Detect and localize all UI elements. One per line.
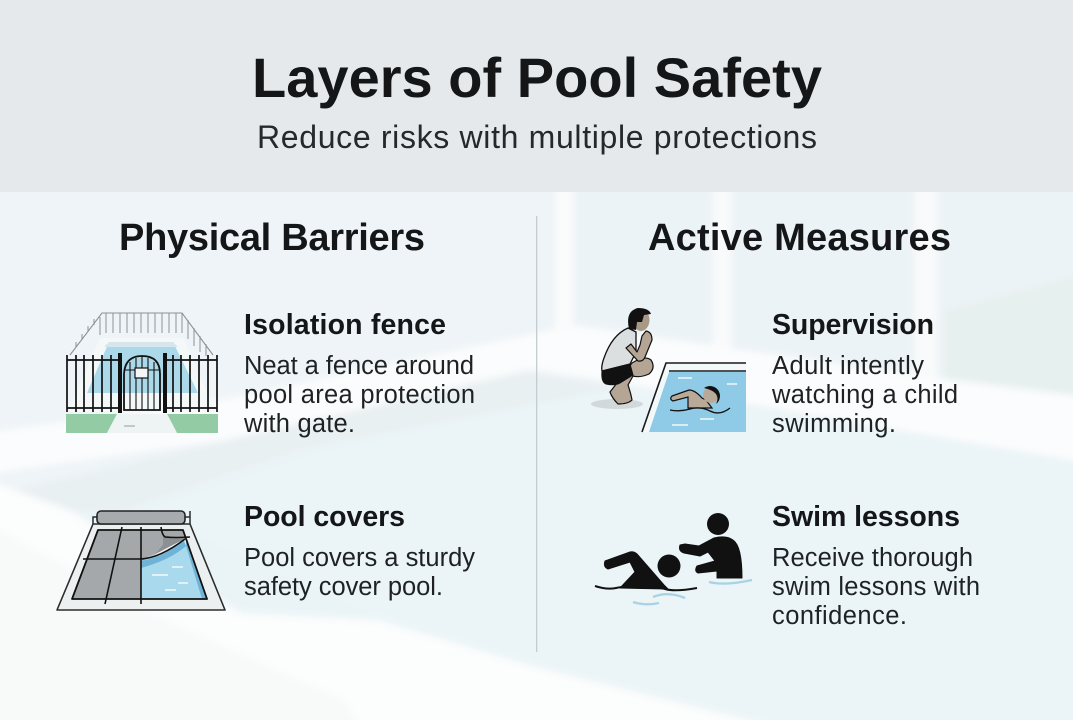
text: pool covers: Pool covers	[244, 501, 405, 533]
center divider	[536, 216, 537, 652]
text: supervision: swimming.	[772, 410, 896, 438]
icon: pool cover	[57, 511, 225, 610]
text: swim lessons: Swim lessons	[772, 501, 960, 533]
text: pool covers	[244, 501, 475, 601]
text: supervision	[771, 309, 958, 438]
subtitle: Reduce risks with multiple protections	[257, 119, 817, 155]
title: Layers of Pool Safety	[252, 46, 822, 109]
panel: physical barriers	[57, 217, 475, 610]
heading: physical barriers: Physical Barriers	[119, 217, 425, 259]
text: swim lessons	[772, 501, 980, 630]
heading: active measures: Active Measures	[648, 217, 951, 259]
text: pool covers: safety cover pool.	[244, 573, 443, 601]
icon: supervision	[591, 308, 746, 432]
icon: swim lessons	[595, 513, 752, 604]
text: supervision: watching a child	[771, 381, 958, 409]
text: isolation fence: with gate.	[243, 410, 355, 438]
background: pool scene	[0, 185, 1073, 720]
text: supervision: Adult intently	[772, 352, 924, 380]
text: isolation fence	[243, 309, 475, 438]
icon: isolation fence	[66, 313, 218, 433]
text: isolation fence: Isolation fence	[244, 309, 446, 341]
text: isolation fence: pool area protection	[244, 381, 475, 409]
text: isolation fence: Neat a fence around	[244, 352, 474, 380]
panel: active measures	[591, 217, 980, 630]
text: swim lessons: Receive thorough	[772, 544, 973, 572]
text: swim lessons: confidence.	[772, 602, 907, 630]
text: swim lessons: swim lessons with	[772, 573, 980, 601]
text: supervision: Supervision	[772, 309, 934, 341]
text: pool covers: Pool covers a sturdy	[244, 544, 475, 572]
header band	[0, 0, 1073, 192]
sub-element: seated adult	[602, 308, 653, 404]
